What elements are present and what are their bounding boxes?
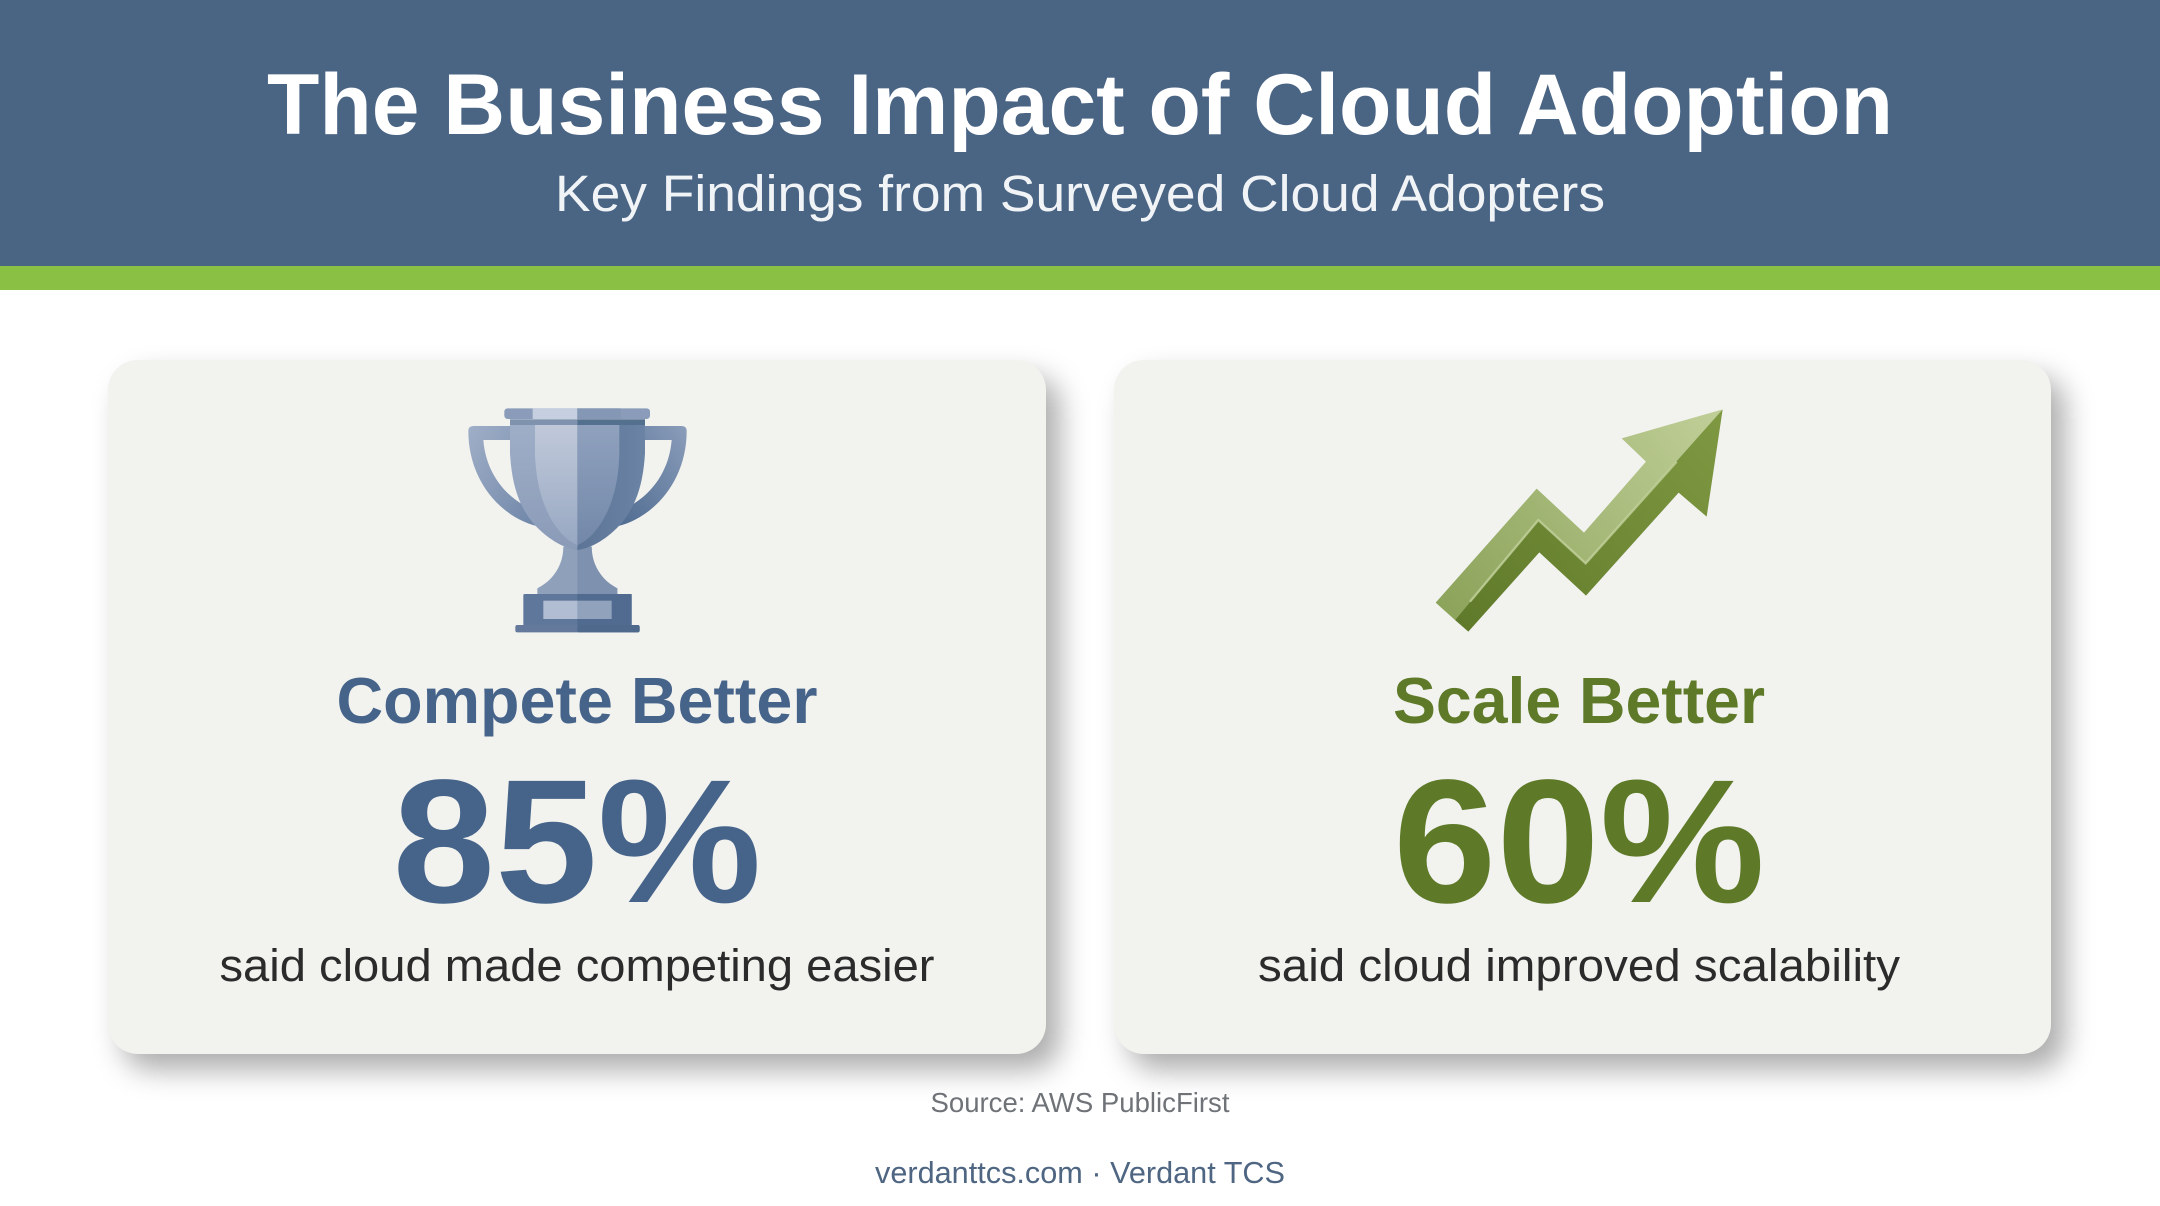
panel: compete better xyxy=(108,360,1060,1070)
title: The Business Impact of Cloud Adoption xyxy=(267,57,1893,153)
green accent bar xyxy=(0,266,2160,290)
stat: 85%: 85% xyxy=(392,744,762,940)
caption: competing: said cloud made competing easier xyxy=(220,940,935,991)
source note: Source: AWS PublicFirst xyxy=(930,1087,1230,1118)
icon: rising arrow xyxy=(1436,409,1723,632)
heading: scale better: Scale Better xyxy=(1393,664,1765,737)
icon: trophy xyxy=(468,408,687,632)
header band xyxy=(0,0,2160,266)
stat: 60%: 60% xyxy=(1393,744,1765,940)
heading: compete better: Compete Better xyxy=(336,664,818,737)
caption: scalability: said cloud improved scalability xyxy=(1258,940,1901,991)
subtitle: Key Findings from Surveyed Cloud Adopters xyxy=(555,165,1605,222)
footer: verdanttcs.com · Verdant TCS xyxy=(875,1155,1285,1190)
panel: scale better xyxy=(1114,360,2065,1070)
